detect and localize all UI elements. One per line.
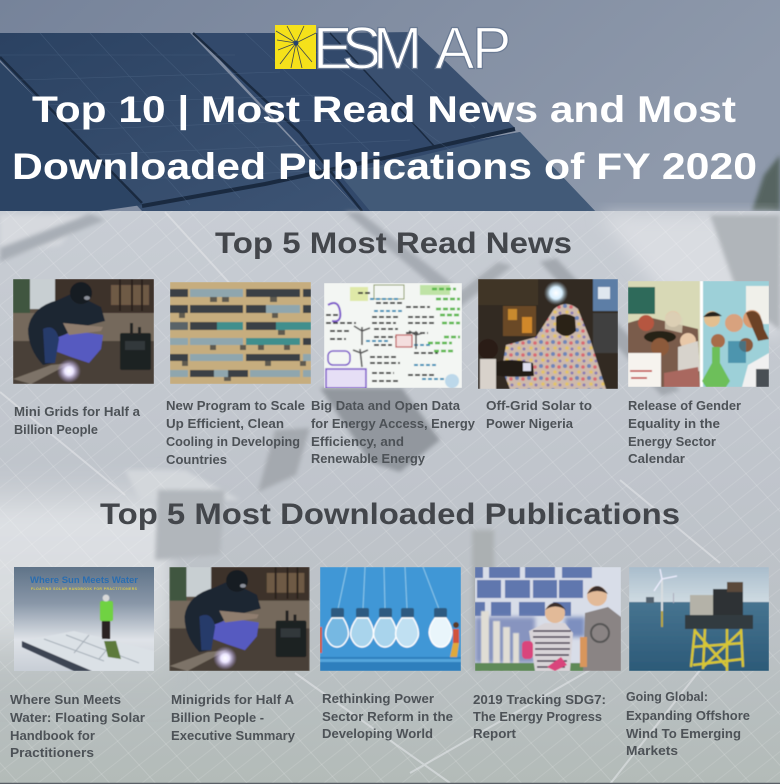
caption 5: Markets — [626, 743, 678, 758]
caption 1 — [14, 404, 141, 437]
tree foliage at right — [752, 155, 780, 211]
caption 3: Sector Reform in the — [322, 709, 453, 724]
caption 1: Water: Floating Solar — [10, 710, 145, 725]
caption 4: Off-Grid Solar to — [486, 398, 592, 413]
photo: welder working on mini grid — [13, 279, 154, 384]
background photo: solar panels and sky — [0, 0, 780, 211]
caption 5: Wind To Emerging — [626, 726, 741, 741]
heading: Top 5 Most Downloaded Publications: Top 5 Most Downloaded Publications — [100, 498, 680, 531]
caption 2: Up Efficient, Clean — [166, 416, 284, 431]
photo: offshore wind and platform — [629, 567, 769, 671]
photo: woman under solar lamp in Nigeria — [478, 279, 618, 389]
caption 3: Renewable Energy — [311, 451, 426, 466]
illustration: gender equality calendar — [628, 281, 769, 387]
caption 2: New Program to Scale — [166, 398, 305, 413]
captions: top 5 news — [14, 398, 741, 467]
caption 5: Going Global: — [626, 689, 708, 704]
caption 4 — [473, 692, 606, 741]
title — [12, 88, 757, 187]
caption 1: Billion People — [14, 422, 98, 437]
caption 4: Power Nigeria — [486, 416, 574, 431]
caption 1: Practitioners — [10, 745, 94, 760]
caption 5: Energy Sector — [628, 434, 716, 449]
caption 4 — [486, 398, 592, 431]
caption 3 — [311, 398, 476, 466]
caption 1: Where Sun Meets — [10, 692, 121, 707]
photo: apartment building with air conditioners — [170, 282, 311, 384]
title: Top 10 | Most Read News and Most — [32, 88, 737, 131]
caption 3 — [322, 691, 453, 741]
logo: ESMAP — [275, 16, 511, 82]
caption 5 — [626, 689, 750, 758]
captions: top 5 publications — [10, 689, 750, 760]
caption 1: Handbook for — [10, 728, 95, 743]
photo: welder, minigrids executive summary — [169, 567, 310, 671]
photo: two women in front of solar panels — [475, 567, 621, 671]
caption 3: Rethinking Power — [322, 691, 434, 706]
logo mark: yellow square with sun rays — [275, 25, 316, 69]
caption 5: Expanding Offshore — [626, 708, 750, 723]
caption 3: for Energy Access, Energy — [311, 416, 476, 431]
caption 2 — [171, 692, 296, 743]
cover: Where Sun Meets Water: Where Sun Meets Water — [30, 575, 138, 586]
caption 2: Cooling in Developing — [166, 434, 300, 449]
caption 1: Mini Grids for Half a — [14, 404, 141, 419]
caption 2: Executive Summary — [171, 728, 296, 743]
caption 4: 2019 Tracking SDG7: — [473, 692, 606, 707]
white panel frames — [0, 212, 720, 784]
caption 2: Minigrids for Half A — [171, 692, 295, 707]
photo: big data graphic recording — [324, 283, 462, 388]
caption 1 — [10, 692, 145, 760]
background photo: back of solar array, pale overlay — [0, 211, 780, 784]
title: Downloaded Publications of FY 2020 — [12, 145, 757, 187]
caption 5: Equality in the — [628, 416, 720, 431]
logo wordmark: ESMAP — [313, 16, 511, 82]
caption 2: Countries — [166, 452, 227, 467]
caption 5: Calendar — [628, 451, 685, 466]
caption 4: The Energy Progress — [473, 709, 602, 724]
caption 4: Report — [473, 726, 517, 741]
gray support struts — [0, 212, 780, 670]
caption 3: Developing World — [322, 726, 433, 741]
caption 5: Release of Gender — [628, 398, 741, 413]
illustration: hanging light bulbs — [320, 567, 461, 671]
cover: Where Sun Meets Water: FLOATING SOLAR HANDBOOK FOR PRACTITIONERS — [31, 587, 138, 591]
caption 3: Efficiency, and — [311, 434, 404, 449]
heading: Top 5 Most Read News: Top 5 Most Read News — [215, 227, 572, 260]
caption 5 — [628, 398, 741, 466]
caption 2 — [166, 398, 305, 467]
cover: Where Sun Meets Water — [14, 567, 154, 671]
caption 2: Billion People - — [171, 710, 264, 725]
caption 3: Big Data and Open Data — [311, 398, 461, 413]
